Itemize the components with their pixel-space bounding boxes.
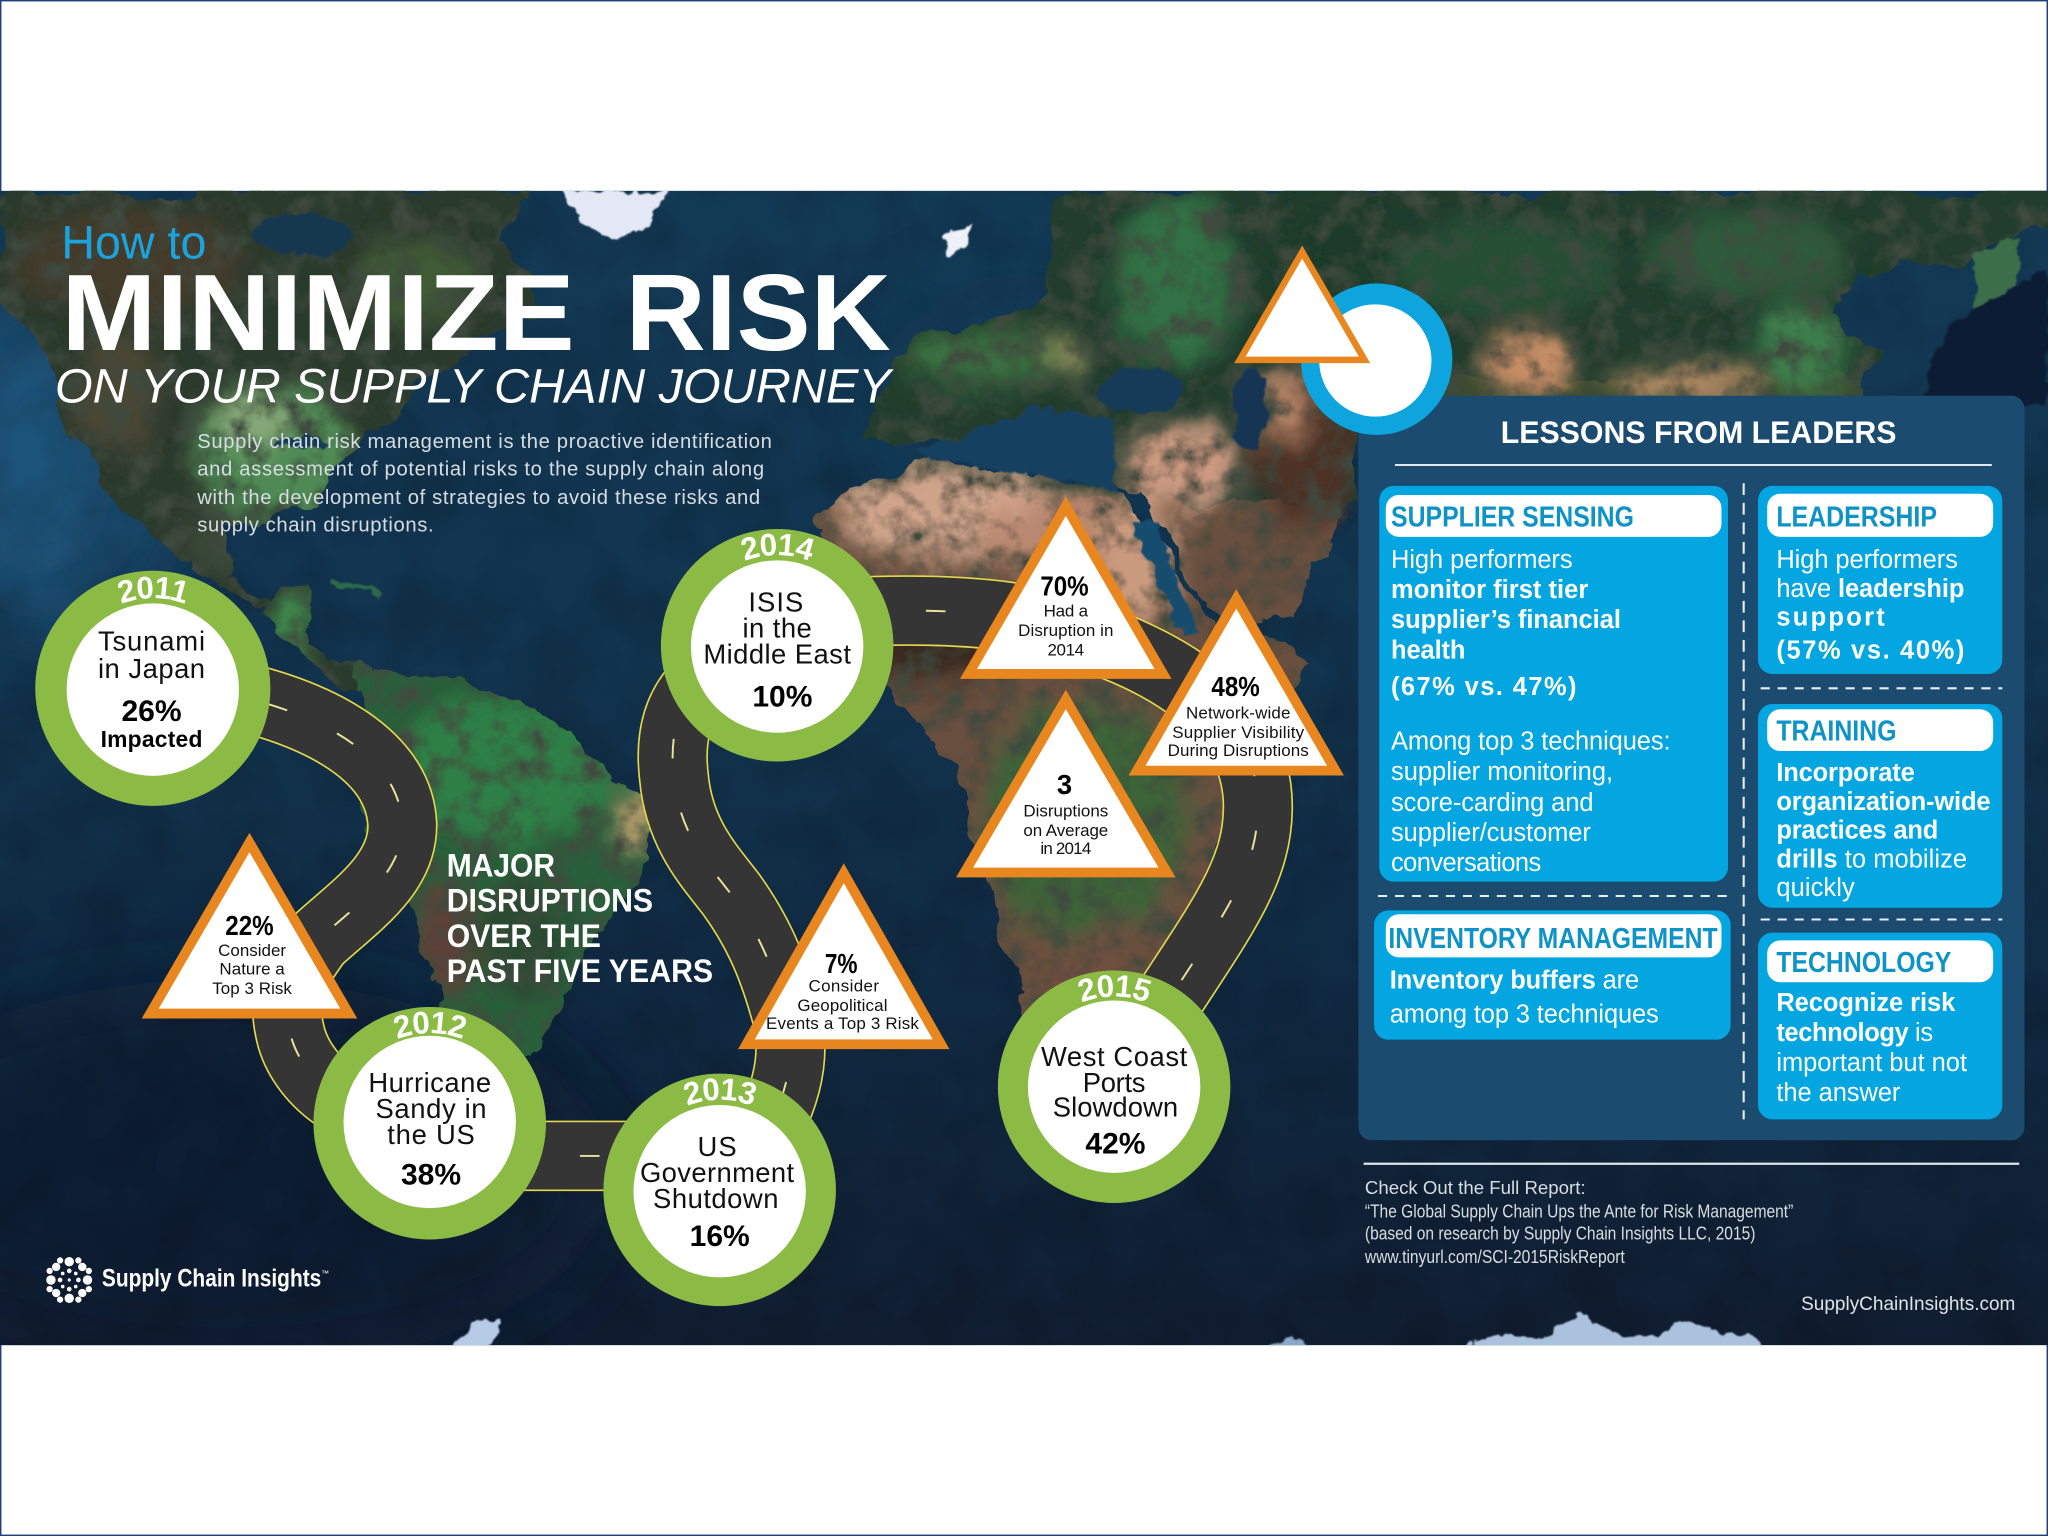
warning triangle: 70% had a disruption: Had a (1044, 601, 1089, 620)
heading: major disruptions (447, 846, 713, 989)
warning triangle: 48% supplier visibility: Network-wide (1186, 703, 1290, 722)
card: supplier sensing: Among top 3 techniques: (1391, 728, 1671, 756)
world map background (0, 191, 2048, 1371)
card: supplier sensing: supplier’s financial (1391, 606, 1621, 634)
card: leadership: (57% vs. 40%) (1776, 636, 1964, 664)
warning triangle: 7% geopolitical risk: Events a Top 3 Risk (766, 1014, 919, 1033)
milestone 2014: ISIS in the Middle East (660, 529, 894, 762)
warning triangle: 7% geopolitical risk: Geopolitical (797, 996, 888, 1015)
milestone 2011: tsunami in Japan: 26% (121, 695, 182, 728)
panel: lessons from leaders: LESSONS FROM LEADERS (1501, 415, 1896, 450)
milestone 2013: US government shutdown: US (697, 1131, 737, 1162)
milestone 2012: hurricane Sandy: the US (387, 1119, 475, 1150)
report citation (1364, 1164, 2019, 1267)
card: training: quickly (1776, 874, 1855, 902)
milestone 2011: tsunami in Japan: Impacted (101, 726, 202, 752)
blank blue circle icon (1301, 283, 1452, 435)
card: supplier sensing: health (1391, 636, 1465, 664)
report citation: (based on research by Supply Chain Insights LLC, 2015) (1365, 1223, 1755, 1244)
card: supplier sensing: supplier/customer (1391, 819, 1591, 847)
warning triangle: 3 disruptions on average: on Average (1023, 821, 1108, 840)
milestone 2014: ISIS in the Middle East: 10% (752, 681, 812, 714)
panel: lessons from leaders (1358, 396, 2024, 1140)
card: supplier sensing: High performers (1391, 546, 1573, 574)
card: inventory management: Inventory buffers are (1390, 967, 1639, 995)
milestone 2012: hurricane Sandy: Sandy in (376, 1093, 487, 1124)
website: SupplyChainInsights.com (1801, 1293, 2015, 1315)
card: leadership: support (1776, 604, 1885, 632)
card: inventory management (1374, 910, 1731, 1040)
warning triangle: 48% supplier visibility: 48% (1211, 671, 1260, 702)
warning triangle: 3 disruptions on average (965, 699, 1167, 872)
card: supplier sensing: conversations (1391, 849, 1541, 877)
milestone 2012: hurricane Sandy (314, 1007, 546, 1240)
warning triangle: 48% supplier visibility: During Disruptions (1168, 741, 1309, 760)
card: technology: important but not (1776, 1049, 1967, 1077)
report citation: “The Global Supply Chain Ups the Ante for Risk Management” (1365, 1200, 1793, 1221)
milestone 2015: West Coast ports slowdown: West Coast (1041, 1041, 1188, 1072)
card: supplier sensing (1379, 486, 1728, 882)
warning triangle: 70% had a disruption: 70% (1040, 571, 1089, 602)
card: leadership: have leadership (1776, 575, 1964, 603)
milestone 2013: US government shutdown: 16% (690, 1220, 750, 1253)
card: supplier sensing: supplier monitoring, (1391, 758, 1613, 786)
warning triangle: 7% geopolitical risk: Consider (808, 976, 879, 995)
intro text block: with the development of strategies to avoid these risks and (196, 487, 760, 509)
warning triangle: 70% had a disruption: 2014 (1048, 641, 1084, 660)
warning triangle: 7% geopolitical risk: 7% (825, 948, 857, 979)
report citation: Check Out the Full Report: (1365, 1177, 1586, 1198)
report citation: www.tinyurl.com/SCI-2015RiskReport (1364, 1246, 1625, 1267)
milestone 2015: West Coast ports slowdown: 42% (1085, 1127, 1145, 1160)
title: RISK (626, 252, 891, 374)
milestone 2012: hurricane Sandy: 2012 (394, 1012, 466, 1039)
card: training: practices and (1776, 817, 1938, 845)
road journey (196, 611, 1258, 1189)
milestone 2011: tsunami in Japan: 2011 (118, 576, 186, 604)
card: leadership: High performers (1776, 546, 1958, 574)
milestone 2012: hurricane Sandy: Hurricane (368, 1067, 491, 1098)
milestone 2011: tsunami in Japan: in Japan (98, 653, 205, 684)
intro text block (196, 431, 772, 537)
milestone 2011: tsunami in Japan (35, 570, 270, 806)
card: inventory management: INVENTORY MANAGEMENT (1388, 923, 1718, 955)
intro text block: supply chain disruptions. (197, 515, 434, 537)
intro text block: and assessment of potential risks to the supply chain along (197, 458, 764, 480)
warning triangle: 70% had a disruption (968, 506, 1163, 674)
warning triangle: 48% supplier visibility: Supplier Visibility (1172, 723, 1305, 742)
card: training: Incorporate (1776, 759, 1915, 787)
title (55, 216, 895, 413)
logo: Supply Chain Insights: Supply Chain Insights (102, 1266, 321, 1293)
warning triangle: 22% nature risk: 22% (225, 910, 274, 941)
milestone 2013: US government shutdown: Government (640, 1157, 794, 1188)
logo: Supply Chain Insights: ™ (321, 1269, 329, 1278)
milestone 2014: ISIS in the Middle East: ISIS (748, 586, 803, 617)
warning triangle: 7% geopolitical risk (746, 873, 941, 1044)
title: ON YOUR SUPPLY CHAIN JOURNEY (55, 359, 895, 413)
card: technology (1758, 933, 2002, 1119)
warning triangle: 70% had a disruption: Disruption in (1018, 621, 1113, 640)
card: technology: the answer (1776, 1079, 1901, 1107)
card: leadership: LEADERSHIP (1776, 501, 1937, 533)
milestone 2012: hurricane Sandy: 38% (401, 1159, 461, 1192)
milestone 2014: ISIS in the Middle East: 2014 (741, 534, 814, 560)
warning triangle: 3 disruptions on average: Disruptions (1023, 801, 1108, 820)
heading: major disruptions: MAJOR (447, 846, 555, 883)
title: MINIMIZE (61, 252, 575, 374)
card: supplier sensing: SUPPLIER SENSING (1391, 501, 1634, 533)
milestone 2014: ISIS in the Middle East: Middle East (703, 639, 851, 670)
milestone 2013: US government shutdown: 2013 (684, 1078, 756, 1106)
milestone 2015: West Coast ports slowdown: Ports (1083, 1067, 1145, 1098)
title: How to (61, 216, 206, 269)
card: training (1758, 704, 2002, 908)
heading: major disruptions: OVER THE (447, 917, 601, 954)
warning triangle: 48% supplier visibility (1137, 599, 1336, 771)
warning triangle: 22% nature risk (150, 842, 349, 1014)
card: technology: Recognize risk (1776, 989, 1956, 1017)
milestone 2015: West Coast ports slowdown: Slowdown (1053, 1092, 1178, 1123)
milestone 2014: ISIS in the Middle East: in the (743, 612, 812, 643)
card: supplier sensing: monitor first tier (1391, 576, 1588, 604)
blank warning triangle icon (1240, 252, 1365, 360)
warning triangle: 3 disruptions on average: in 2014 (1040, 839, 1091, 858)
milestone 2013: US government shutdown (603, 1074, 836, 1306)
milestone 2015: West Coast ports slowdown: 2015 (1078, 975, 1152, 1002)
warning triangle: 22% nature risk: Nature a (219, 959, 285, 978)
card: supplier sensing: score-carding and (1391, 789, 1593, 817)
card: training: TRAINING (1776, 716, 1896, 748)
card: supplier sensing: (67% vs. 47%) (1391, 673, 1576, 701)
warning triangle: 22% nature risk: Consider (218, 941, 286, 960)
card: inventory management: among top 3 techniques (1390, 1001, 1659, 1029)
milestone 2011: tsunami in Japan: Tsunami (98, 625, 205, 656)
card: technology: TECHNOLOGY (1776, 947, 1951, 979)
heading: major disruptions: PAST FIVE YEARS (447, 952, 713, 989)
card: leadership (1758, 486, 2002, 674)
milestone 2013: US government shutdown: Shutdown (653, 1183, 778, 1214)
card: technology: technology is (1776, 1019, 1933, 1047)
card: training: organization-wide (1776, 788, 1991, 816)
milestone 2015: West Coast ports slowdown (998, 970, 1230, 1203)
intro text block: Supply chain risk management is the proactive identification (197, 431, 772, 453)
card: training: drills to mobilize (1776, 845, 1967, 873)
heading: major disruptions: DISRUPTIONS (447, 882, 653, 919)
logo: Supply Chain Insights (46, 1257, 329, 1303)
warning triangle: 3 disruptions on average: 3 (1057, 769, 1072, 800)
warning triangle: 22% nature risk: Top 3 Risk (212, 979, 292, 998)
